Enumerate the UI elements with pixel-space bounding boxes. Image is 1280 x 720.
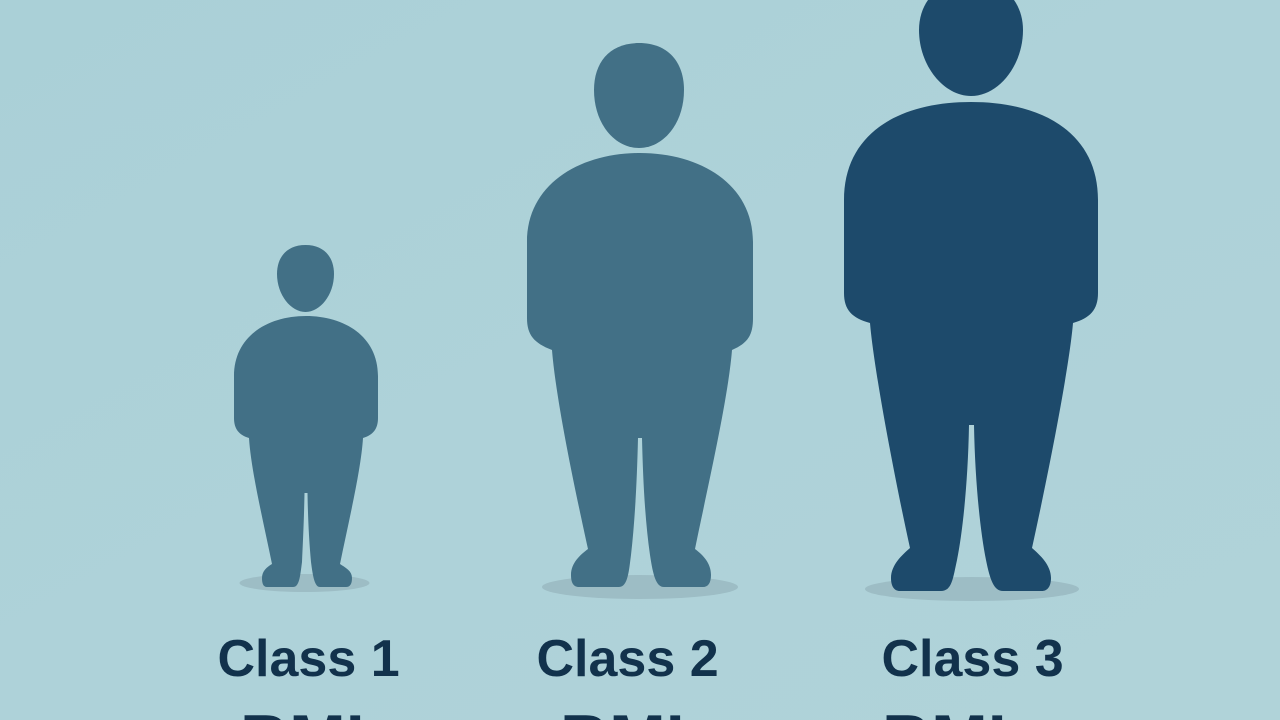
ground shadow: Class 1 xyxy=(240,574,370,592)
figure: Class 2 silhouette xyxy=(527,43,753,599)
ground shadow: Class 2 xyxy=(542,575,738,599)
label: Class 1: Class 1 xyxy=(218,630,400,688)
head: Class 3 xyxy=(919,0,1023,96)
label: Class 3: Class 3 xyxy=(882,630,1064,688)
body: Class 2 xyxy=(527,153,753,587)
ground shadow: Class 3 xyxy=(865,577,1079,601)
body: Class 1 xyxy=(234,316,378,587)
label: Class 2: Class 2 xyxy=(536,630,719,688)
body: Class 3 xyxy=(844,102,1098,591)
head: Class 2 xyxy=(594,43,684,148)
head: Class 1 xyxy=(277,245,334,312)
figure: Class 3 silhouette xyxy=(844,0,1098,601)
figure: Class 1 silhouette xyxy=(234,245,378,592)
